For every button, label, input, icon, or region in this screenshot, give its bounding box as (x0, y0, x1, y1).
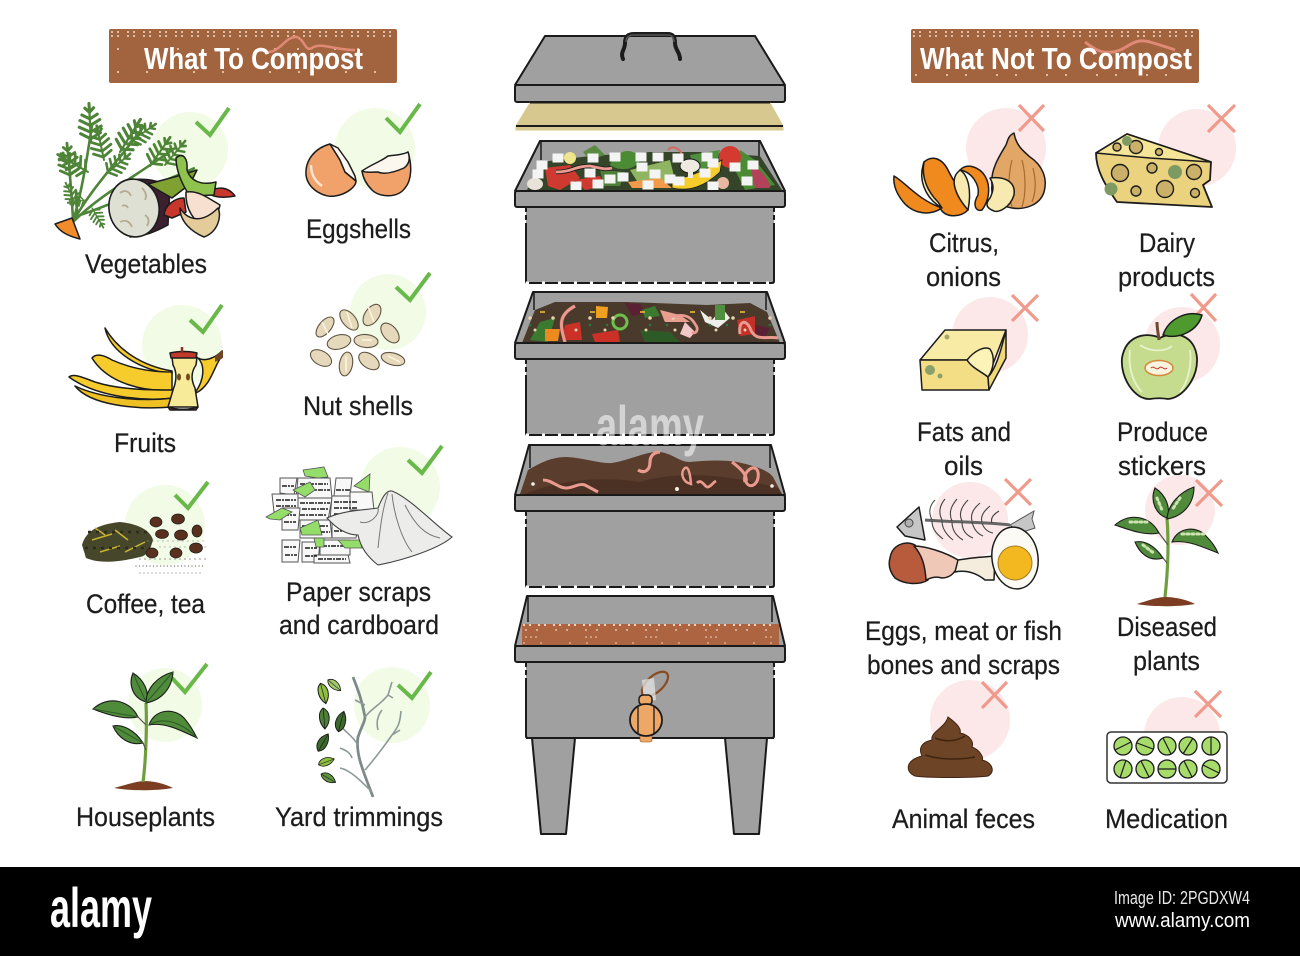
icon: tea leaves and coffee beans with check mark (82, 482, 210, 573)
label: Produce (1117, 417, 1208, 447)
watermark: alamy (596, 394, 704, 457)
tray 1: fresh food scraps (515, 141, 785, 283)
label line 2: plants (1133, 646, 1200, 676)
compost item: Vegetables (53, 103, 235, 279)
tan moisture mat (516, 103, 783, 130)
bin legs (532, 738, 767, 834)
compost bin (515, 34, 785, 834)
label line 2: bones and scraps (867, 650, 1060, 680)
label: Eggs, meat or fish (865, 616, 1062, 646)
icon: eggshells with check mark (306, 104, 420, 196)
heading: What Not To Compost (911, 29, 1199, 83)
label line 2: onions (926, 262, 1001, 292)
avoid item: Medication (1105, 691, 1228, 834)
compost item: Nut shells (303, 273, 430, 421)
footer bar (0, 867, 1300, 956)
tray 4: base with finished compost and tap (515, 596, 785, 742)
avoid item: Diseased plants (1115, 475, 1222, 676)
footer image id: Image ID: 2PGDXW4 (1114, 888, 1250, 908)
label: Nut shells (303, 391, 413, 421)
icon: nut shells with check mark (308, 273, 430, 377)
compost item: Houseplants (76, 664, 215, 832)
heading: What To Compost (109, 29, 397, 83)
label: Dairy (1139, 228, 1195, 258)
label line 2: and cardboard (279, 610, 439, 640)
compost item: Paper scraps and cardboard (266, 446, 452, 640)
avoid item: Citrus, onions (894, 105, 1046, 292)
label: Houseplants (76, 802, 215, 832)
avoid item: Fats and oils (917, 295, 1038, 481)
label: Fruits (114, 428, 176, 458)
label: Eggshells (306, 214, 411, 244)
compost item: Coffee, tea (82, 482, 210, 619)
heading: What To Compost: What To Compost (144, 41, 363, 76)
label line 2: products (1118, 262, 1215, 292)
icon: moldy cheese with cross (1096, 105, 1236, 207)
label: Animal feces (892, 804, 1035, 834)
tray 3: dark vermicompost with worms (515, 445, 785, 587)
icon: fish bones, meat and egg with cross (889, 479, 1042, 592)
compost item: Yard trimmings (275, 667, 443, 832)
label: Citrus, (929, 228, 999, 258)
label line 2: stickers (1118, 451, 1206, 481)
icon: houseplant with check mark (93, 664, 207, 790)
label: Fats and (917, 417, 1011, 447)
label: Medication (1105, 804, 1228, 834)
icon: paper scraps with check mark (266, 446, 452, 565)
heading: What Not To Compost: What Not To Compost (920, 41, 1192, 76)
icon: animal feces with cross (908, 680, 1010, 778)
icon: spotted plant with cross (1115, 475, 1222, 606)
label: Coffee, tea (86, 589, 206, 619)
footer url: www.alamy.com (1114, 910, 1250, 932)
label: Diseased (1117, 612, 1217, 642)
footer logo: alamy (50, 876, 152, 939)
icon: banana peels and apple core with check mark (69, 305, 223, 410)
icon: butter with cross (920, 295, 1038, 390)
bin lid (515, 34, 785, 102)
tap (630, 667, 672, 742)
label: Yard trimmings (275, 802, 443, 832)
compost item: Eggshells (306, 104, 420, 244)
icon: branches with check mark (314, 667, 431, 797)
tray 2: partly composted scraps with worms (515, 292, 785, 435)
icon: blister pack of pills with cross (1107, 691, 1227, 783)
icon: orange peel and onion with cross (894, 105, 1046, 216)
avoid item: Eggs, meat or fish bones and scraps (865, 479, 1062, 680)
avoid item: Animal feces (892, 680, 1035, 834)
icon: apple with sticker and cross (1122, 294, 1220, 399)
label: Vegetables (85, 249, 207, 279)
avoid item: Dairy products (1096, 105, 1236, 292)
label line 2: oils (944, 451, 983, 481)
label: Paper scraps (286, 577, 431, 607)
avoid item: Produce stickers (1117, 294, 1220, 481)
icon: vegetables with check mark (53, 103, 235, 241)
compost item: Fruits (69, 305, 223, 458)
